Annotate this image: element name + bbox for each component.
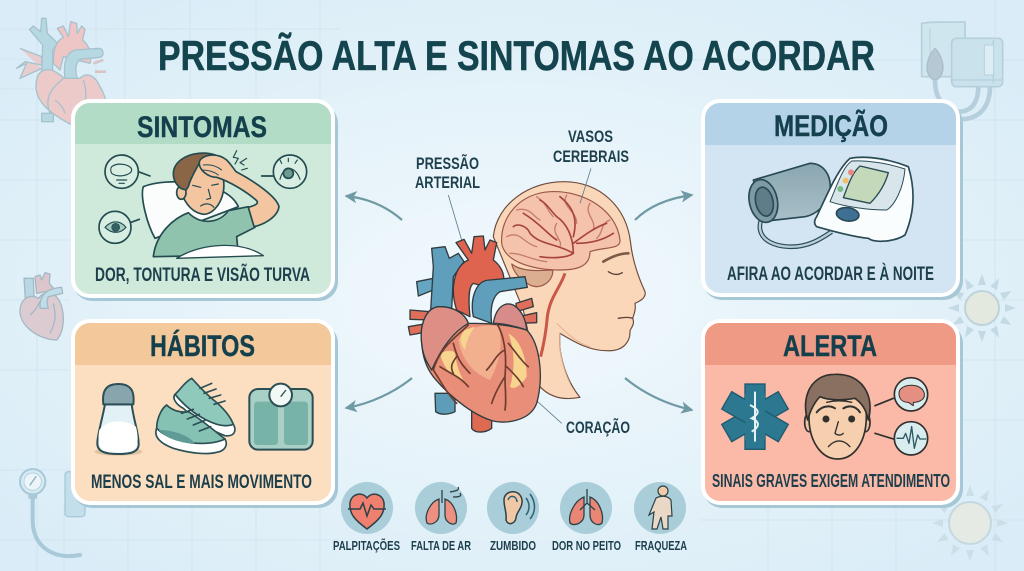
decoration: faded blood pressure monitor top right <box>922 22 1003 119</box>
caption: medição: AFIRA AO ACORDAR E À NOITE <box>727 263 934 285</box>
decoration: sun right <box>948 274 1016 342</box>
panel: sintomas <box>73 101 338 301</box>
caption: sintomas: DOR, TONTURA E VISÃO TURVA <box>95 264 310 286</box>
arrow: to medição <box>635 195 692 220</box>
label: pressão arterial: PRESSÃO <box>416 153 479 173</box>
head profile <box>493 182 645 399</box>
facial features <box>603 253 628 262</box>
coronary vessels <box>433 323 528 410</box>
illustration: head in profile with brain and heart <box>408 168 645 432</box>
decoration: faded heart left <box>20 273 63 340</box>
heading: medição: MEDIÇÃO <box>774 109 888 143</box>
heading: alerta: ALERTA <box>783 330 877 363</box>
icon: bathroom scale <box>249 384 313 450</box>
symptom: zumbido: ZUMBIDO <box>490 538 536 553</box>
decoration: faded heart top left <box>17 18 106 125</box>
symptom: fraqueza: FRAQUEZA <box>635 538 687 553</box>
label: coração: CORAÇÃO <box>566 417 630 437</box>
illustration: man with headache in bed <box>99 151 307 258</box>
label: vasos cerebrais: CEREBRAIS <box>553 147 629 166</box>
heart <box>408 236 540 432</box>
carotid artery <box>541 273 565 357</box>
decoration: faded stethoscope bottom left <box>20 469 85 556</box>
caption: hábitos: MENOS SAL E MAIS MOVIMENTO <box>91 472 312 493</box>
heading: hábitos: HÁBITOS <box>150 329 255 363</box>
illustration: blood pressure monitor with cuff <box>745 157 913 247</box>
heading: sintomas: SINTOMAS <box>137 111 267 144</box>
panel: medição <box>703 101 963 300</box>
arrow: to sintomas <box>346 196 402 220</box>
label: pressão arterial <box>415 153 480 192</box>
panel: alerta <box>703 321 963 508</box>
heart body <box>421 307 540 422</box>
decoration: sun bottom right <box>932 485 1008 561</box>
title: PRESSÃO ALTA E SINTOMAS AO ACORDAR <box>158 32 875 79</box>
label: pressão arterial: ARTERIAL <box>415 173 480 192</box>
icon: salt shaker <box>94 384 142 456</box>
illustration: worried man's face <box>805 374 928 459</box>
symptom: dor no peito <box>552 482 621 553</box>
leader lines <box>448 168 591 423</box>
icon: running shoes <box>156 378 235 454</box>
icon: star of life <box>722 384 788 449</box>
brain <box>502 192 620 287</box>
symptom: dor no peito: DOR NO PEITO <box>552 538 621 553</box>
symptom: palpitações <box>333 482 400 553</box>
arrow: to hábitos <box>346 378 412 408</box>
label: vasos cerebrais <box>553 127 629 166</box>
symptom: palpitações: PALPITAÇÕES <box>333 538 400 553</box>
great vessels <box>435 393 455 414</box>
label: vasos cerebrais: VASOS <box>568 127 613 146</box>
symptom: falta de ar <box>411 482 471 553</box>
symptom: zumbido <box>487 482 539 553</box>
symptom: fraqueza <box>634 482 687 553</box>
arrow: to alerta <box>625 378 692 410</box>
panel: hábitos <box>73 321 338 508</box>
symptom: falta de ar: FALTA DE AR <box>411 538 471 553</box>
